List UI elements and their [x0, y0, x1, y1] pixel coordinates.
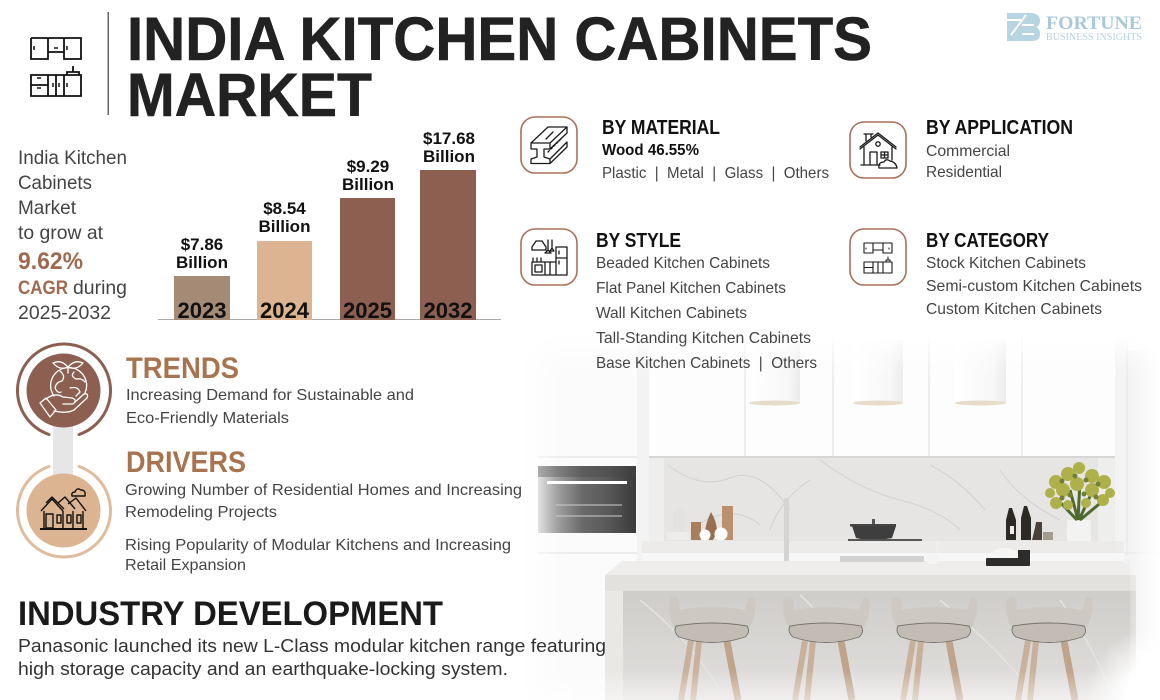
counter objects	[667, 506, 1053, 542]
bar 2023: Billion	[176, 253, 228, 272]
logo: Fortune Business Insights	[1007, 13, 1142, 43]
CAGR text block	[18, 147, 127, 324]
panel: by style	[521, 229, 817, 372]
bar 2024: $8.54	[263, 199, 306, 218]
icon: kitchen appliances	[521, 229, 577, 285]
title divider	[108, 12, 109, 115]
title: MARKET	[127, 61, 372, 129]
trends text: Increasing Demand for Sustainable and	[126, 387, 414, 404]
stools	[669, 596, 1092, 700]
trends text	[126, 352, 414, 427]
panel: by style: BY STYLE	[596, 230, 681, 252]
pendant lamps	[749, 351, 1006, 406]
plant	[1045, 462, 1115, 541]
panel: by category: Stock Kitchen Cabinets	[926, 255, 1086, 272]
CAGR text block: Market	[18, 197, 77, 219]
panel: by application: BY APPLICATION	[926, 117, 1073, 139]
drivers text: Rising Popularity of Modular Kitchens and Increasing	[125, 537, 511, 554]
CAGR text block: 2025-2032	[18, 302, 111, 324]
panel: by application	[850, 117, 1073, 181]
icon: trends badge	[18, 344, 111, 434]
CAGR text block: Cabinets	[18, 172, 92, 194]
island	[605, 556, 1136, 700]
counter	[642, 541, 1124, 553]
industry development: high storage capacity and an earthquake-locking system.	[18, 658, 508, 679]
drivers text: DRIVERS	[126, 446, 246, 479]
trends text: Eco-Friendly Materials	[126, 410, 289, 427]
connector	[53, 425, 73, 477]
drivers text	[125, 446, 522, 574]
trends text: TRENDS	[126, 352, 239, 385]
title	[127, 5, 872, 129]
icon: cabinets	[850, 229, 906, 285]
bar chart	[158, 129, 501, 323]
drivers text: Growing Number of Residential Homes and Increasing	[125, 482, 522, 499]
logo: Fortune Business Insights: BUSINESS INSIGHTS	[1046, 32, 1142, 43]
panel: by style: Wall Kitchen Cabinets	[596, 305, 747, 322]
bar 2025: Billion	[342, 175, 394, 194]
panel: by category	[850, 229, 1142, 318]
title: INDIA KITCHEN CABINETS	[127, 5, 872, 73]
CAGR text block: to grow at	[18, 222, 104, 244]
drivers text: Retail Expansion	[125, 557, 246, 574]
drivers text: Remodeling Projects	[125, 504, 277, 521]
industry development	[18, 595, 606, 679]
panel: by style: Tall-Standing Kitchen Cabinets	[596, 330, 811, 347]
panel: by material	[521, 117, 829, 182]
panel: by application: Residential	[926, 164, 1002, 181]
bar 2025	[340, 157, 395, 323]
panel: by material: Plastic | Metal | Glass | Others	[602, 165, 829, 182]
upper cabinets	[649, 345, 1115, 458]
CAGR text block: 9.62%	[18, 248, 83, 275]
bar 2023: 2023	[178, 298, 226, 323]
bar 2023	[174, 235, 230, 323]
bar 2023: $7.86	[181, 235, 223, 254]
bar 2025: 2025	[343, 298, 392, 323]
CAGR text block: India Kitchen	[18, 147, 127, 169]
island objects	[924, 548, 1030, 566]
CAGR text block: during	[73, 277, 127, 299]
icon: steel beam	[521, 117, 577, 173]
industry development: INDUSTRY DEVELOPMENT	[18, 595, 443, 633]
industry development: Panasonic launched its new L-Class modular kitchen range featuring	[18, 635, 606, 656]
bar 2032	[420, 129, 476, 323]
oven	[538, 466, 636, 533]
panel: by application: Commercial	[926, 143, 1010, 160]
panel: by category: Custom Kitchen Cabinets	[926, 301, 1102, 318]
bar 2024: 2024	[260, 298, 310, 323]
bar 2032: 2032	[424, 298, 472, 323]
panel: by style: Base Kitchen Cabinets | Others	[596, 355, 817, 372]
header icon: kitchen cabinets	[31, 38, 81, 96]
bar 2032: Billion	[423, 147, 475, 166]
bar 2025: $9.29	[347, 157, 389, 176]
marble backsplash	[649, 458, 1115, 542]
logo: Fortune Business Insights: FORTUNE	[1046, 13, 1142, 34]
panel: by material: BY MATERIAL	[602, 117, 720, 139]
CAGR text block: CAGR	[18, 277, 68, 299]
kitchen photo	[538, 344, 1148, 700]
panel: by category: Semi-custom Kitchen Cabinets	[926, 278, 1142, 295]
bar 2024: Billion	[259, 217, 310, 236]
panel: by category: BY CATEGORY	[926, 230, 1050, 252]
panel: by style: Beaded Kitchen Cabinets	[596, 255, 770, 272]
faucet	[784, 498, 789, 562]
icon: house	[850, 122, 906, 178]
bar 2032: $17.68	[423, 129, 475, 148]
panel: by material: Wood 46.55%	[602, 142, 699, 159]
icon: drivers badge	[18, 466, 111, 557]
bar 2024	[257, 199, 312, 323]
panel: by style: Flat Panel Kitchen Cabinets	[596, 280, 786, 297]
